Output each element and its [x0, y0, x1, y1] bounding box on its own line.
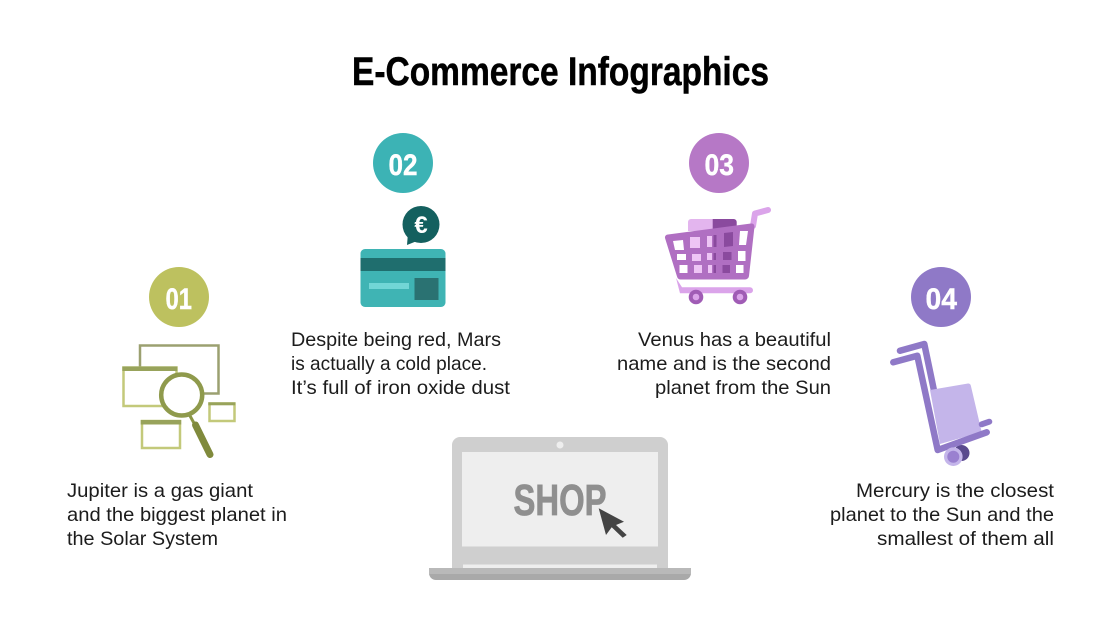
number badge 02: 02	[388, 149, 418, 182]
number badge 04: 04	[926, 283, 957, 316]
text block 01: and the biggest planet in	[67, 504, 287, 526]
number badge 02	[373, 133, 433, 193]
icon: credit card with euro bubble	[360, 206, 446, 307]
text block 03: name and is the second	[617, 353, 831, 375]
text block 01: the Solar System	[67, 528, 218, 550]
title: E-Commerce Infographics	[352, 50, 769, 94]
icon: magnifier over windows	[122, 346, 235, 454]
text block 02: Despite being red, Mars	[291, 329, 501, 351]
number badge 04	[911, 267, 971, 327]
laptop illustration	[429, 437, 691, 580]
icon: shopping cart	[665, 210, 768, 302]
text block 01	[67, 480, 287, 550]
SHOP label: SHOP	[514, 476, 606, 525]
text block 02: It’s full of iron oxide dust	[291, 377, 511, 399]
panel: step 04	[830, 267, 1055, 550]
icon: mouse cursor	[599, 508, 627, 538]
panel: step 01	[67, 267, 287, 550]
text block 03: planet from the Sun	[655, 377, 831, 399]
text block 04: planet to the Sun and the	[830, 504, 1054, 526]
text block 04	[830, 480, 1055, 550]
text block 03: Venus has a beautiful	[638, 329, 831, 351]
number badge 01	[149, 267, 209, 327]
panel: step 03	[617, 133, 831, 399]
number badge 01: 01	[166, 283, 192, 316]
text block 02	[291, 329, 511, 399]
number badge 03	[689, 133, 749, 193]
icon: hand truck with box	[893, 344, 989, 466]
panel: step 02	[291, 133, 511, 399]
number badge 03: 03	[704, 149, 734, 182]
icon: credit card with euro bubble: €	[414, 212, 428, 239]
text block 04: Mercury is the closest	[856, 480, 1055, 502]
text block 02: is actually a cold place.	[291, 353, 487, 375]
text block 04: smallest of them all	[877, 528, 1054, 550]
text block 03	[617, 329, 831, 399]
text block 01: Jupiter is a gas giant	[67, 480, 254, 502]
